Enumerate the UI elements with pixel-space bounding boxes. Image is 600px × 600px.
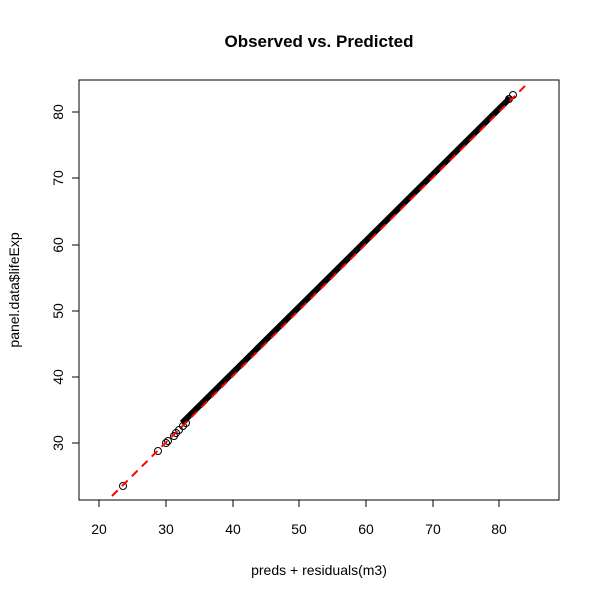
x axis label: preds + residuals(m3) bbox=[251, 562, 387, 578]
x axis: 60 bbox=[358, 521, 374, 537]
x axis: 70 bbox=[425, 521, 441, 537]
y axis label: panel.data$lifeExp bbox=[6, 232, 22, 348]
y axis: 50 bbox=[50, 303, 66, 319]
plot frame bbox=[79, 80, 559, 500]
y axis: 70 bbox=[50, 170, 66, 186]
red dashed reference line bbox=[112, 85, 526, 496]
title: Observed vs. Predicted bbox=[225, 32, 413, 51]
x axis: 40 bbox=[225, 521, 241, 537]
x axis: 20 bbox=[91, 521, 107, 537]
x axis: 30 bbox=[158, 521, 174, 537]
x axis bbox=[91, 500, 507, 537]
scatter points bbox=[120, 92, 516, 490]
y axis: 30 bbox=[50, 435, 66, 451]
x axis: 50 bbox=[291, 521, 307, 537]
y axis: 80 bbox=[50, 104, 66, 120]
y axis: 40 bbox=[50, 369, 66, 385]
y axis: 60 bbox=[50, 237, 66, 253]
y axis bbox=[50, 104, 79, 451]
x axis: 80 bbox=[491, 521, 507, 537]
